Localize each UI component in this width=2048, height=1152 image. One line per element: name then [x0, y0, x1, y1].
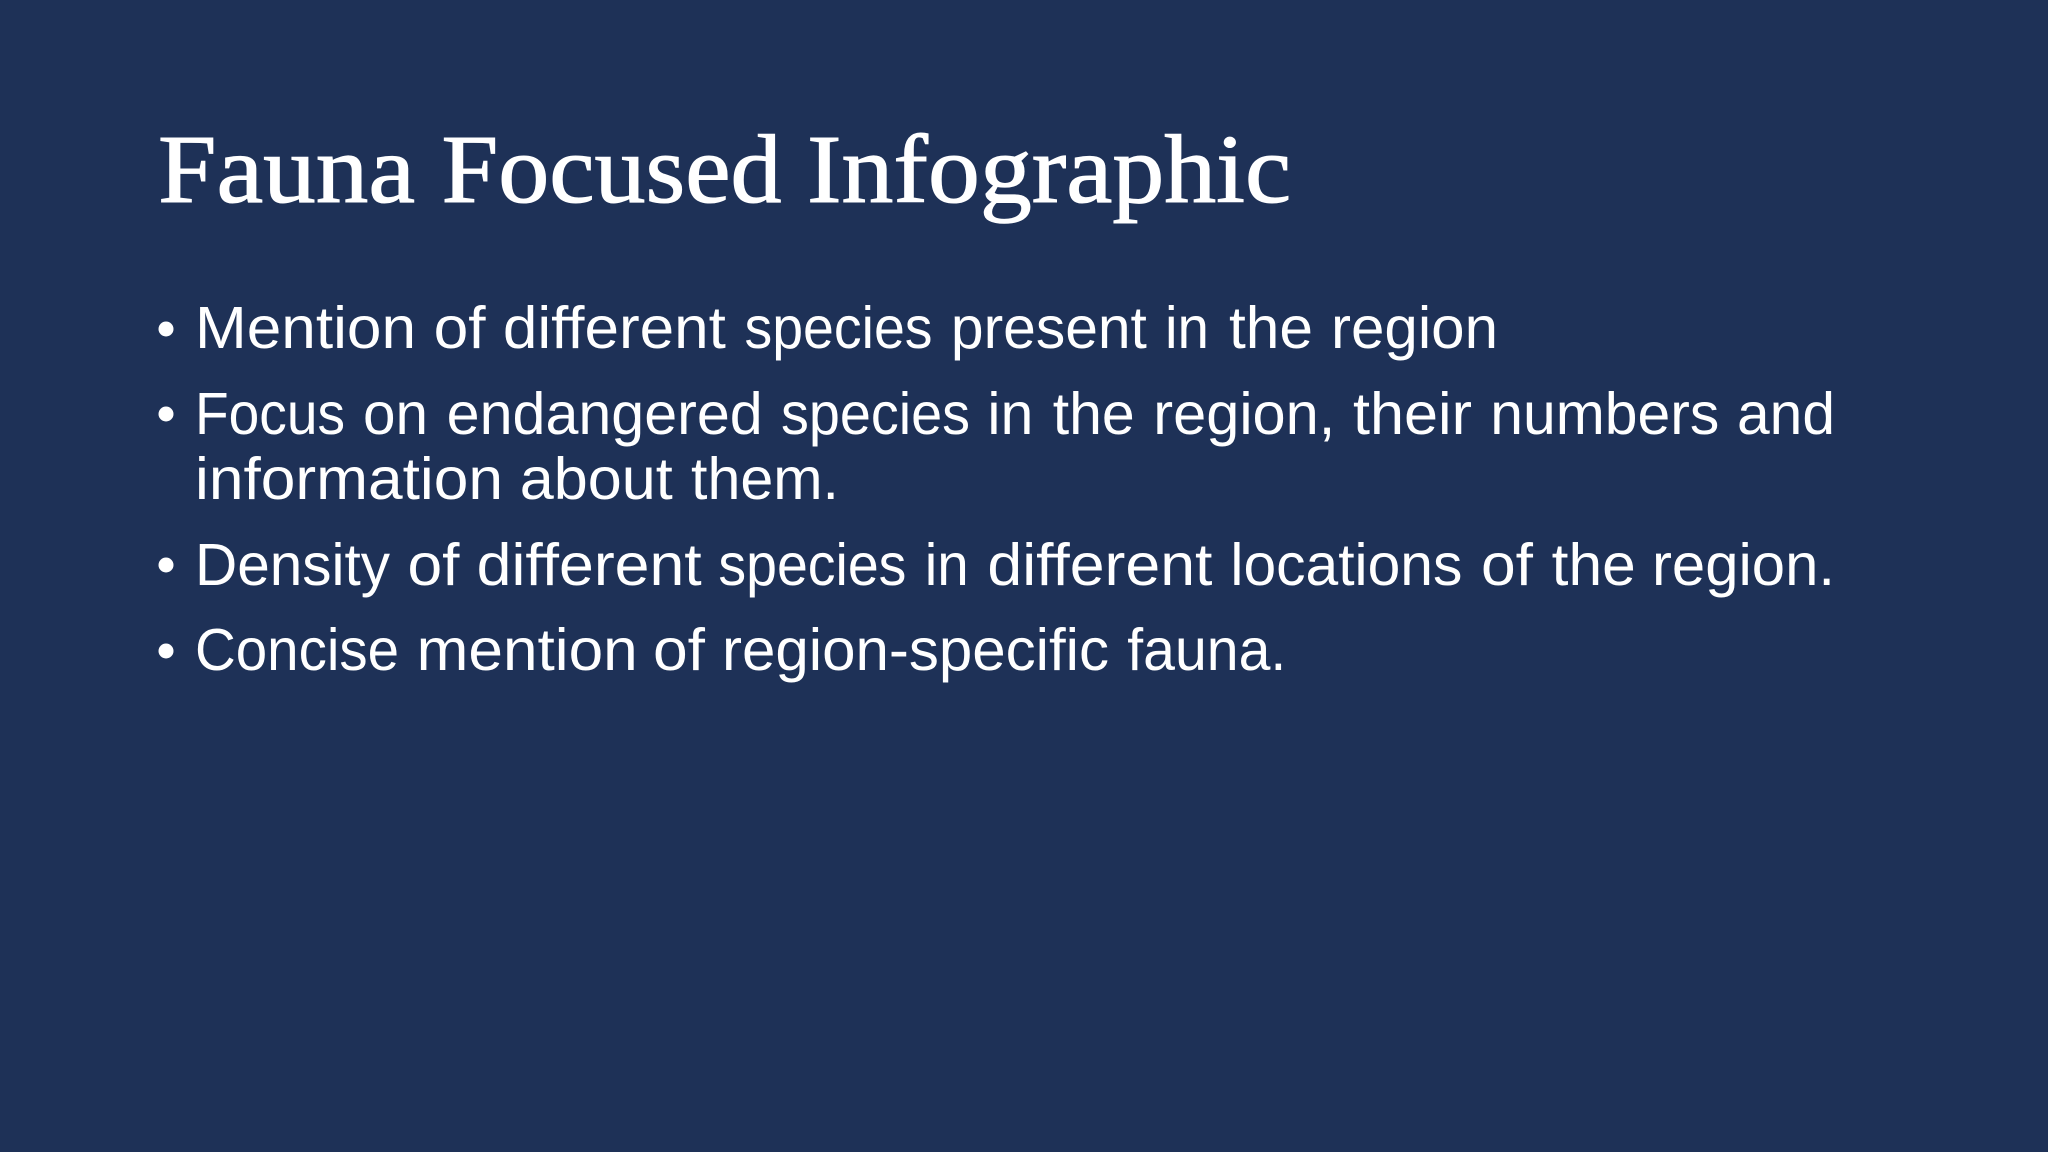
bullet 2: endangered	[447, 381, 763, 447]
bullet 2: Focus	[195, 381, 345, 447]
bullet 3: locations	[1230, 532, 1462, 598]
bullet 1: different	[503, 295, 726, 361]
bullet 1: present	[951, 295, 1147, 361]
bullet 1: Mention	[195, 295, 416, 361]
bullet 2: region,	[1153, 381, 1335, 447]
bullet 1: the	[1229, 295, 1313, 361]
bullet 3: species	[718, 532, 906, 598]
bullet 3: different	[477, 532, 702, 598]
bullet 4	[158, 617, 1286, 683]
bullet 4: mention	[417, 617, 638, 683]
bullet 2: about	[520, 446, 673, 512]
bullet 1: of	[434, 295, 486, 361]
bullet 2	[158, 381, 1835, 512]
title: Infographic	[807, 116, 1291, 223]
bullet 1: in	[1165, 295, 1209, 361]
bullet 3: the	[1552, 532, 1636, 598]
title: Fauna	[158, 116, 415, 223]
bullet 3: of	[408, 532, 460, 598]
bullet 4: of	[653, 617, 706, 683]
bullet 3: of	[1481, 532, 1534, 598]
bullet 3: different	[987, 532, 1212, 598]
bullet 3: Density	[195, 532, 390, 598]
bullet 2: and	[1737, 381, 1835, 447]
title: Focused	[442, 116, 782, 223]
bullet 4: Concise	[195, 617, 399, 683]
bullet 2: the	[1053, 381, 1135, 447]
bullet 4: region-specific	[722, 617, 1109, 683]
bullet 2: numbers	[1490, 381, 1719, 447]
bullet 2: information	[195, 446, 503, 512]
bullet 3: region.	[1652, 532, 1835, 598]
title	[158, 116, 1291, 223]
bullet 2: species	[781, 381, 970, 447]
bullet 3: in	[925, 532, 969, 598]
bullet 1	[158, 295, 1498, 361]
bullet 2: on	[363, 381, 428, 447]
bullet 4: fauna.	[1127, 617, 1286, 683]
bullet list	[158, 295, 1835, 683]
bullet 3	[158, 532, 1835, 598]
bullet 2: them.	[691, 446, 839, 512]
bullet 2: their	[1353, 381, 1472, 447]
bullet 1: region	[1331, 295, 1498, 361]
bullet 2: in	[987, 381, 1033, 447]
bullet 1: species	[744, 295, 932, 361]
